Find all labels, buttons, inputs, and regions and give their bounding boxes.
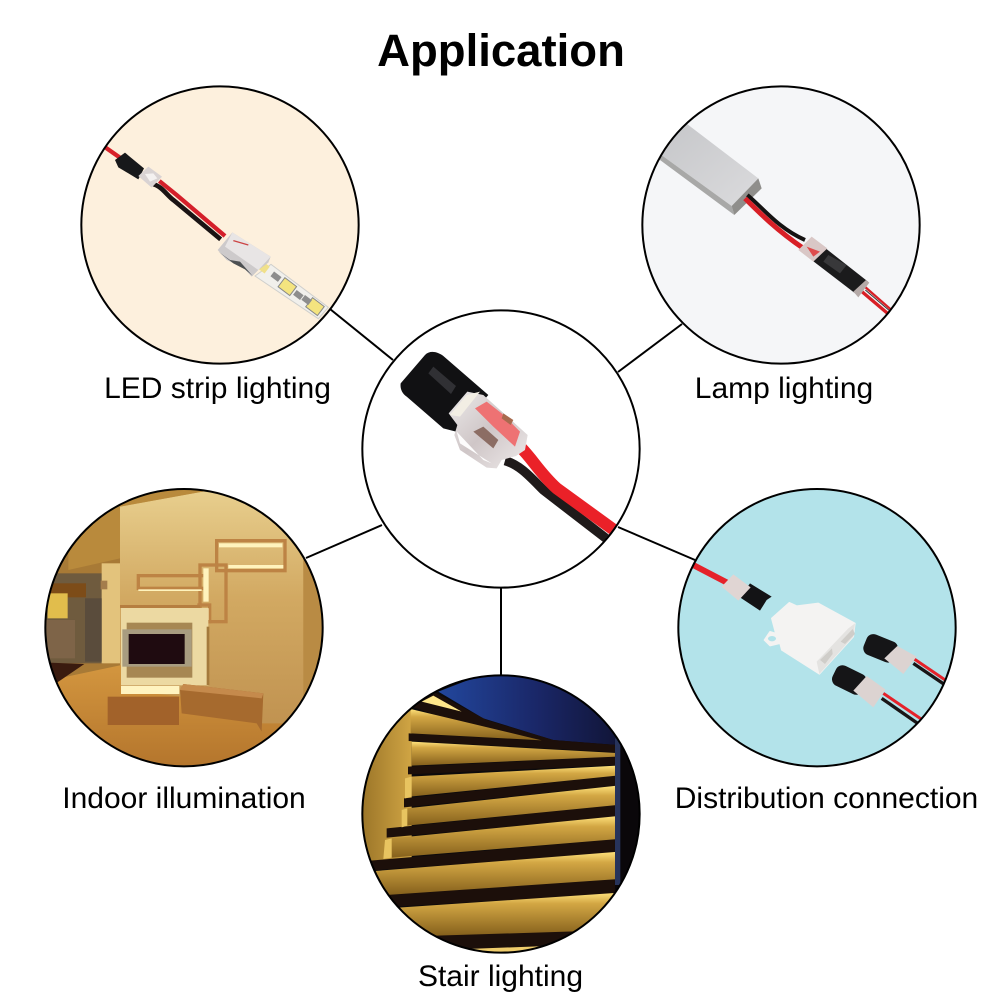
wires [103,146,225,239]
night sky [438,672,617,745]
label: LED strip lighting: LED strip lighting [104,372,331,405]
aluminium profile [662,124,758,206]
label: Indoor illumination: Indoor illumination [62,782,306,815]
LED strip [255,264,328,319]
pendant lights [48,593,68,618]
panel: Stair lighting [361,674,641,954]
room left side [58,553,120,677]
splitter box [764,603,855,674]
panel: Distribution connection [678,489,956,766]
wires [505,447,614,538]
label: Distribution connection: Distribution connection [675,782,978,815]
left wall [363,709,412,861]
connector [812,246,868,295]
right post [615,738,619,891]
wood frames [138,541,285,622]
wires [745,195,893,318]
clear housing [449,392,528,468]
mantel and TV niche [120,605,200,608]
floor [58,665,282,766]
black boot [401,352,488,432]
label: Stair lighting: Stair lighting [418,960,583,993]
connector lines [306,309,695,675]
panel: LED strip lighting [81,86,359,364]
title: Application [377,25,625,76]
wall light slivers [405,777,412,798]
right plug 2 [832,665,866,695]
low cabinets [108,697,179,725]
panel: Indoor illumination [44,488,324,768]
panel: Lamp lighting [642,86,920,364]
treads [422,696,462,712]
small connector [115,153,144,179]
strip connector [218,232,271,277]
ceiling [120,490,203,507]
dark nosing bars [371,692,619,948]
left plug [740,583,772,611]
panel: centre connector [362,310,640,588]
label: Lamp lighting: Lamp lighting [695,372,873,405]
wires [690,563,947,725]
feature wall [120,492,304,670]
right plug 1 [863,634,898,663]
